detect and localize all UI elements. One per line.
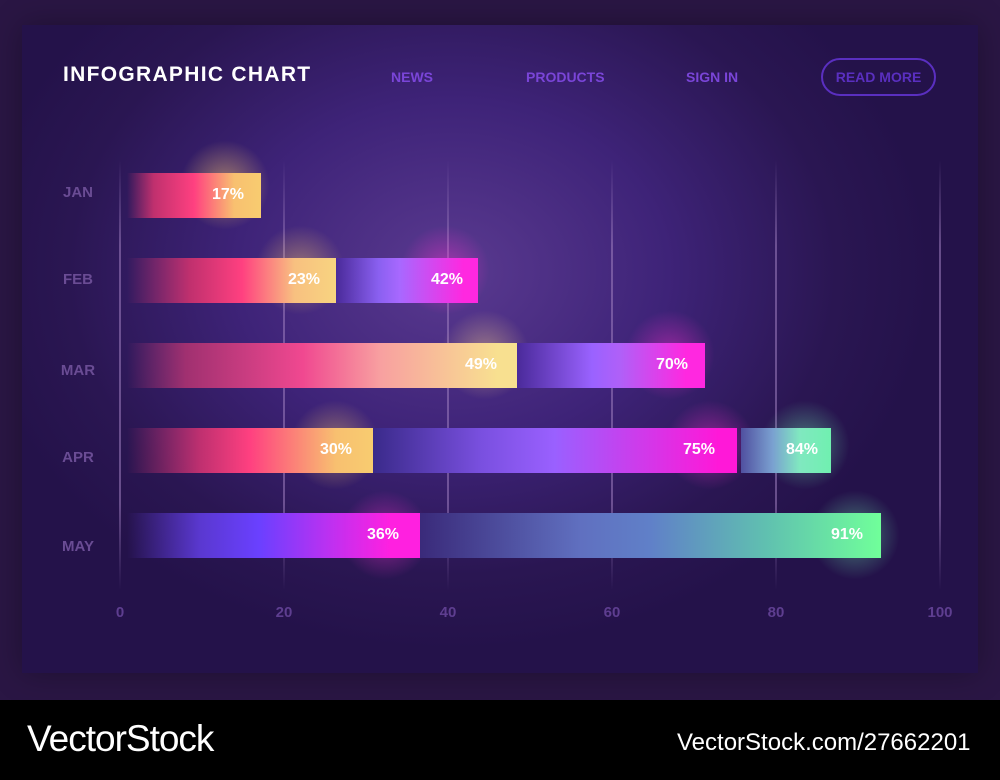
bar: may 2: 91%: [831, 526, 863, 543]
bar: may 2: [420, 513, 881, 558]
bar: apr 3: [741, 428, 831, 473]
glows: [186, 144, 896, 576]
bar: apr: 30%: [320, 441, 352, 458]
bar: feb 2: [336, 258, 478, 303]
text: 80: [768, 604, 784, 621]
text: 100: [927, 604, 953, 621]
nav: products: PRODUCTS: [526, 69, 605, 85]
bar: mar 2: [517, 343, 705, 388]
text: 20: [276, 604, 292, 621]
footer bar: [0, 700, 1000, 780]
bar: apr 2: 75%: [683, 441, 715, 458]
panel: chart card: [22, 25, 978, 673]
text: 0: [116, 604, 124, 621]
bar: feb: 23%: [288, 271, 320, 288]
month labels: [61, 184, 95, 555]
bar: jan: [127, 173, 261, 218]
bar: may: [127, 513, 420, 558]
text: MAY: [62, 538, 94, 555]
bar: apr: [127, 428, 373, 473]
bar: may: 36%: [367, 526, 399, 543]
bar: mar: [127, 343, 517, 388]
grid lines: [119, 171, 941, 580]
bar: apr 3: 84%: [786, 441, 818, 458]
nav: news: NEWS: [391, 69, 433, 85]
footer url: VectorStock.com/27662201: [677, 729, 971, 756]
bar: jan: 17%: [212, 186, 244, 203]
button: read more: [821, 58, 936, 96]
button: read more: READ MORE: [836, 69, 921, 85]
bar: mar 2: 70%: [656, 356, 688, 373]
bar: feb 2: 42%: [431, 271, 463, 288]
text: FEB: [63, 271, 93, 288]
text: MAR: [61, 362, 95, 379]
footer logo: VectorStock: [27, 718, 213, 759]
text: 40: [440, 604, 456, 621]
x axis labels: [116, 604, 953, 621]
bar: mar: 49%: [465, 356, 497, 373]
bar: apr 2: [373, 428, 737, 473]
title: INFOGRAPHIC CHART: [63, 63, 311, 86]
bar: feb: [127, 258, 336, 303]
text: JAN: [63, 184, 93, 201]
text: 60: [604, 604, 620, 621]
text: APR: [62, 449, 94, 466]
nav: sign in: SIGN IN: [686, 69, 738, 85]
